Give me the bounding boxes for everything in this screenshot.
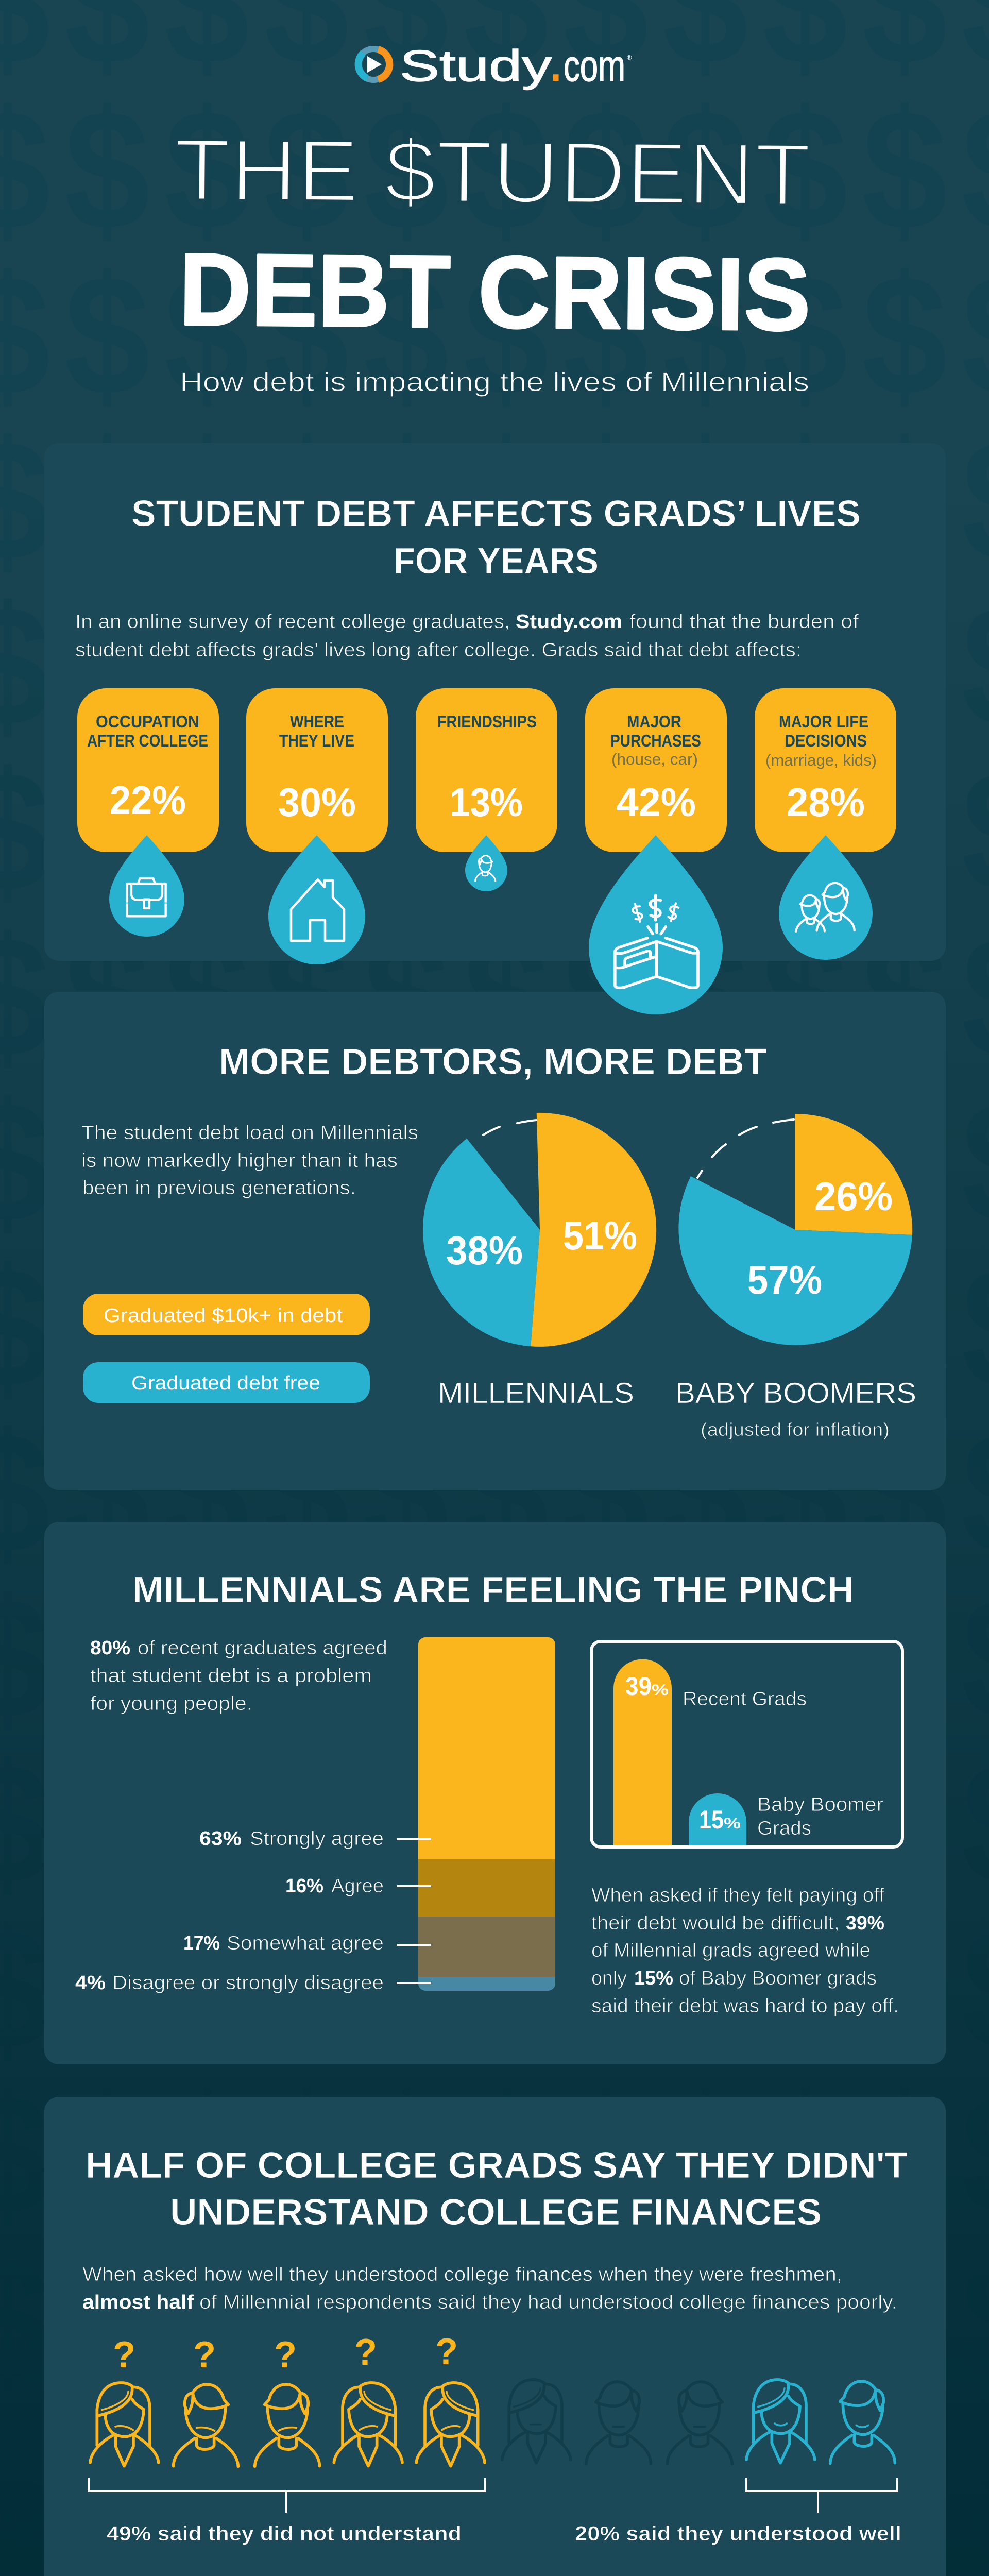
text block: of Baby Boomer grads — [679, 1968, 877, 1989]
card: major purchases: (house, car) — [611, 750, 698, 768]
text block: that student debt is a problem — [90, 1665, 372, 1687]
note: adjusted for inflation: (adjusted for inflation) — [701, 1419, 890, 1440]
card: major purchases — [585, 688, 727, 852]
person 5 — [416, 2383, 485, 2466]
panel: millennials are feeling the pinch — [44, 1522, 946, 2064]
label: millennials: MILLENNIALS — [438, 1377, 634, 1410]
text block: been in previous generations. — [82, 1177, 356, 1199]
text block: 15% — [634, 1968, 673, 1989]
bar label: strongly agree — [199, 1828, 384, 1850]
label: 49%: 49% said they did not understand — [107, 2522, 462, 2545]
question marks: ? — [193, 2334, 216, 2376]
panel: half of college grads — [44, 2097, 946, 2576]
heading: HALF OF COLLEGE GRADS SAY THEY DIDN'T — [86, 2145, 908, 2186]
people who understood well — [746, 2380, 895, 2463]
card: major life decisions: DECISIONS — [785, 731, 867, 750]
logo: Study.com: . — [550, 42, 561, 91]
text block: only — [591, 1968, 627, 1989]
bracket: understood well — [746, 2478, 897, 2513]
text block: for young people. — [90, 1693, 252, 1715]
comparison bar chart box: Recent Grads — [683, 1688, 807, 1710]
title line 2: DEBT CRISIS — [179, 232, 811, 352]
text block: When asked how well they understood college finances when they were freshmen, — [82, 2264, 842, 2285]
people who were neutral — [502, 2380, 732, 2464]
card: occupation: AFTER COLLEGE — [87, 731, 208, 750]
logo: Study.com: com — [564, 42, 625, 91]
comparison bar chart box: 39 — [625, 1672, 652, 1701]
pie chart: baby boomers: 26% — [814, 1174, 893, 1219]
question marks — [113, 2331, 458, 2376]
card: where they live — [246, 688, 388, 852]
text block: said their debt was hard to pay off. — [591, 1995, 899, 2017]
question marks: ? — [113, 2334, 135, 2376]
legend: graduated debt free — [83, 1362, 370, 1403]
legend: graduated with debt — [83, 1294, 370, 1335]
text block — [90, 1637, 387, 1715]
bar label: disagree: 4% — [75, 1972, 106, 1994]
logo: Study.com: Study — [400, 42, 552, 91]
person 6 — [502, 2380, 571, 2463]
text block: The student debt load on Millennials — [81, 1122, 418, 1144]
card: major life decisions — [755, 688, 896, 852]
question marks: ? — [435, 2331, 458, 2372]
pie chart: baby boomers — [678, 1114, 912, 1345]
comparison bar chart box: % — [652, 1682, 669, 1699]
label: baby boomers: BABY BOOMERS — [675, 1377, 916, 1410]
panel: more debtors, more debt — [44, 992, 946, 1490]
card: major life decisions: MAJOR LIFE — [779, 712, 868, 731]
bar label: somewhat agree: 17% — [183, 1933, 220, 1954]
bar label: strongly agree: Strongly agree — [250, 1828, 384, 1850]
heading — [86, 2145, 908, 2233]
person 2 — [174, 2384, 238, 2466]
card: major purchases: MAJOR — [627, 712, 681, 731]
stacked bar chart — [397, 1637, 555, 1991]
text block: 80% — [90, 1637, 130, 1659]
card: where they live: THEY LIVE — [279, 731, 354, 750]
bar label: agree — [285, 1875, 384, 1897]
pie chart: millennials: 51% — [563, 1213, 637, 1258]
card: major life decisions: 28% — [787, 779, 865, 825]
question marks: ? — [354, 2332, 377, 2373]
title line 1: THE $TUDENT — [174, 121, 811, 224]
person 10 — [830, 2381, 895, 2463]
text block: is now markedly higher than it has — [81, 1150, 398, 1172]
text block: 39% — [846, 1912, 884, 1934]
label: 20%: 20% said they understood well — [575, 2522, 901, 2545]
person 3 — [255, 2384, 319, 2466]
person 4 — [334, 2383, 402, 2466]
text block: their debt would be difficult, — [591, 1912, 840, 1934]
bar label: disagree: Disagree or strongly disagree — [112, 1972, 384, 1994]
text block: of Millennial grads agreed while — [591, 1940, 871, 1961]
text block — [82, 2264, 897, 2313]
people who did not understand — [90, 2383, 485, 2466]
pie chart: millennials — [423, 1113, 656, 1347]
comparison bar chart box — [591, 1641, 902, 1847]
icon: play ring — [358, 49, 389, 80]
text block: When asked if they felt paying off — [591, 1885, 884, 1906]
heading: MORE DEBTORS, MORE DEBT — [219, 1042, 767, 1082]
logo: Study.com — [358, 42, 632, 91]
card: occupation: 22% — [110, 777, 186, 823]
comparison bar chart box: Grads — [757, 1818, 811, 1839]
comparison bar chart box: 15 — [699, 1805, 724, 1834]
person 9 — [746, 2380, 815, 2463]
card: major purchases: 42% — [617, 779, 696, 825]
drop with icon: parent and child — [779, 835, 873, 960]
bar label: agree: 16% — [285, 1875, 323, 1897]
heading: STUDENT DEBT AFFECTS GRADS’ LIVES — [131, 494, 861, 534]
text block: of recent graduates agreed — [138, 1637, 387, 1659]
logo: Study.com: ® — [627, 54, 632, 61]
pie chart: millennials: 38% — [446, 1228, 523, 1273]
comparison bar chart box: % — [724, 1815, 741, 1832]
card: friendships: FRIENDSHIPS — [437, 712, 537, 731]
card: friendships: 13% — [450, 779, 523, 825]
text block: In an online survey of recent college graduates, — [75, 611, 510, 633]
bar label: strongly agree: 63% — [199, 1828, 242, 1850]
heading: FOR YEARS — [394, 541, 599, 582]
bar label: somewhat agree: Somewhat agree — [227, 1933, 384, 1954]
text block — [81, 1122, 418, 1199]
heading: UNDERSTAND COLLEGE FINANCES — [170, 2192, 822, 2233]
bar label: agree: Agree — [331, 1875, 384, 1897]
card: occupation: OCCUPATION — [96, 712, 199, 731]
heading: MILLENNIALS ARE FEELING THE PINCH — [132, 1570, 854, 1611]
card: friendships — [416, 688, 557, 852]
text block: of Millennial respondents said they had understood college finances poorly. — [199, 2292, 897, 2313]
legend: graduated with debt: Graduated $10k+ in debt — [104, 1305, 343, 1327]
comparison bar chart box: Baby Boomer — [757, 1794, 883, 1816]
text block — [75, 611, 859, 661]
card: occupation — [77, 688, 219, 852]
drop with icon: wallet and dollars — [589, 835, 723, 1014]
person 1 — [90, 2383, 159, 2466]
pie chart: baby boomers: 57% — [747, 1257, 822, 1302]
card: where they live: WHERE — [290, 712, 344, 731]
text block — [591, 1885, 899, 2017]
drop with icon: person — [465, 835, 507, 891]
card: major purchases: PURCHASES — [610, 731, 701, 750]
panel: student debt affects grads' lives — [44, 443, 946, 1014]
heading — [131, 494, 861, 582]
text block: student debt affects grads' lives long after college. Grads said that debt affects: — [75, 639, 802, 661]
drop with icon: briefcase — [109, 835, 184, 937]
text block: found that the burden of — [629, 611, 859, 633]
text block: almost half — [82, 2292, 194, 2313]
person 7 — [586, 2382, 651, 2464]
person 8 — [668, 2382, 732, 2464]
legend: graduated debt free: Graduated debt free — [131, 1372, 320, 1394]
card: where they live: 30% — [278, 779, 356, 825]
text block: Study.com — [516, 611, 622, 633]
card: major life decisions: (marriage, kids) — [765, 751, 877, 769]
question marks: ? — [274, 2334, 297, 2376]
bracket: did not understand — [89, 2478, 485, 2513]
subtitle: How debt is impacting the lives of Millennials — [180, 367, 809, 397]
drop with icon: house — [268, 835, 365, 964]
